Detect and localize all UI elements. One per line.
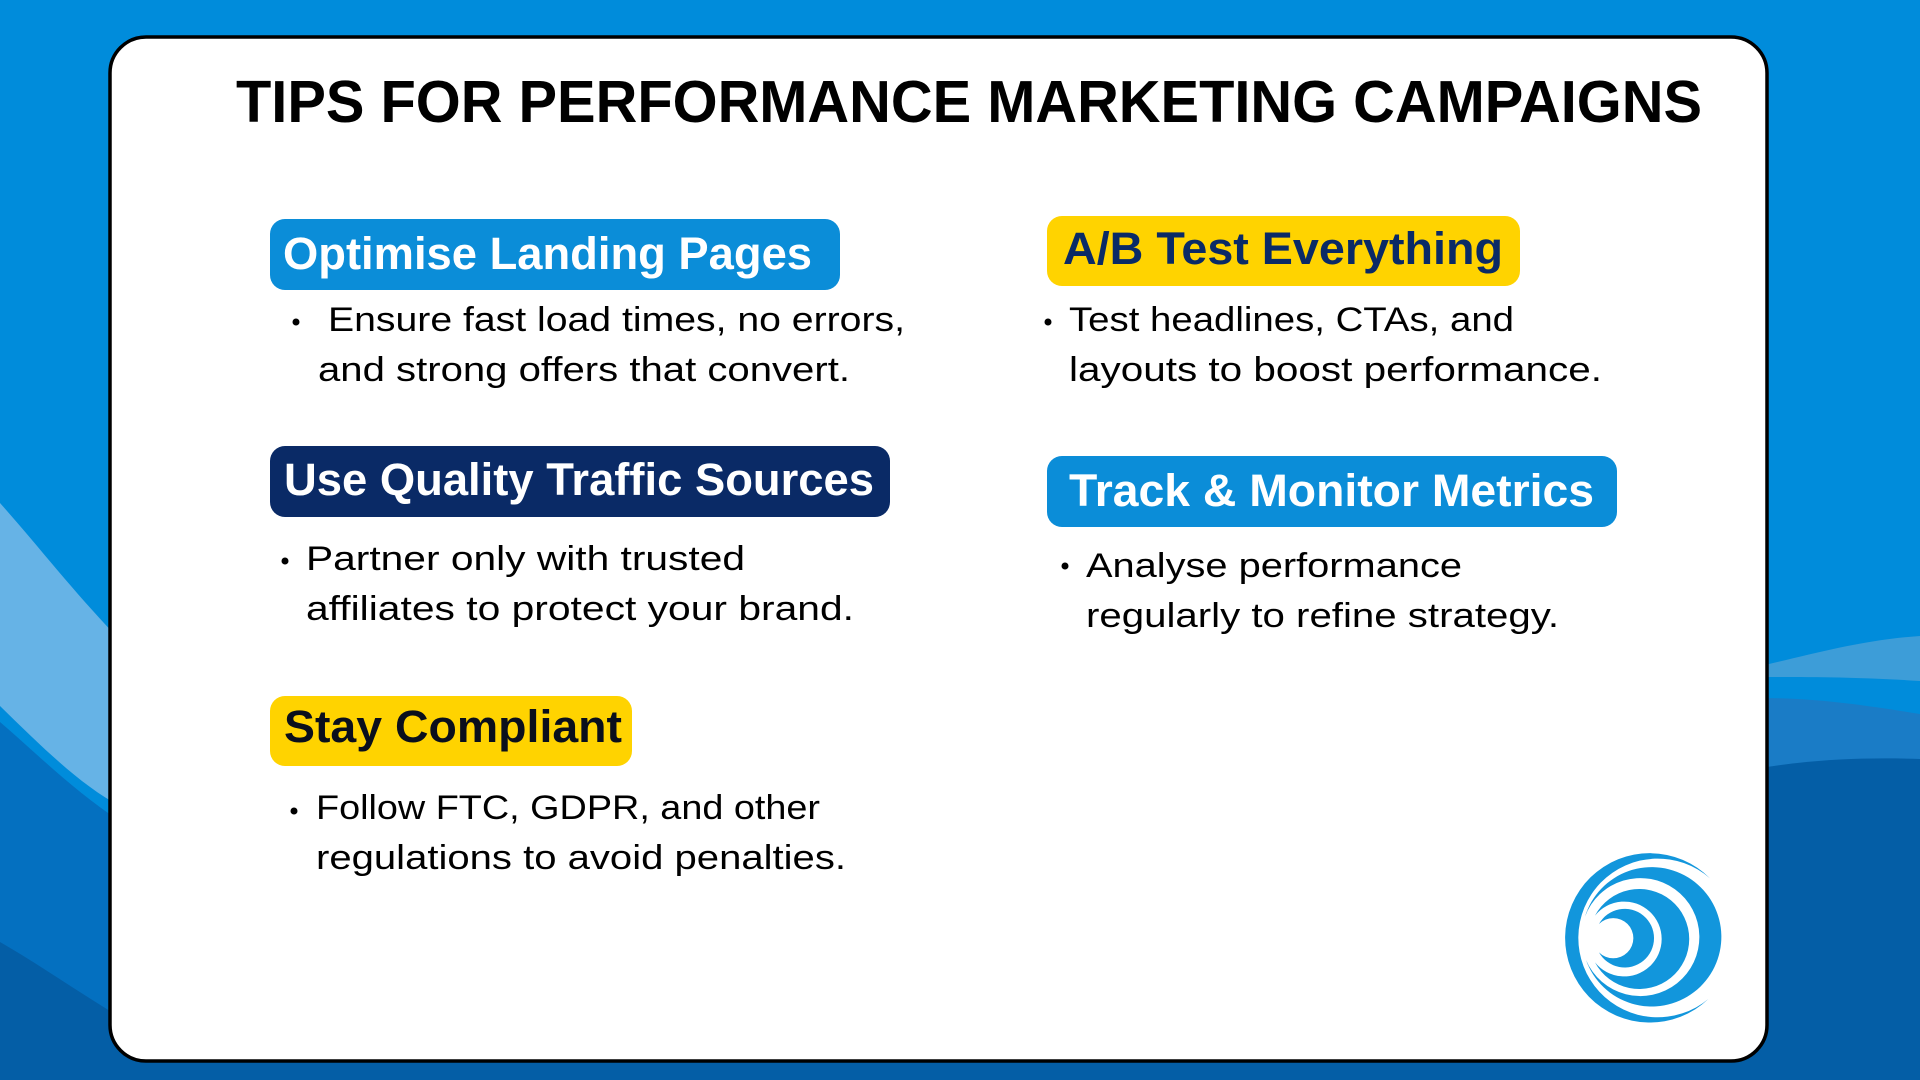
heading: use quality traffic sources — [270, 446, 890, 517]
heading: a/b test everything — [1047, 216, 1520, 286]
bullet text: optimise landing pages: Ensure fast load times, no errors, — [328, 301, 905, 339]
heading: track and monitor metrics: Track & Monitor Metrics — [1069, 465, 1594, 516]
icon: swirl logo — [1565, 853, 1721, 1023]
bullet text: use quality traffic sources: Partner only with trusted — [306, 540, 745, 578]
heading: optimise landing pages: Optimise Landing Pages — [283, 228, 812, 279]
heading: use quality traffic sources: Use Quality Traffic Sources — [284, 454, 874, 505]
bullet text: track and monitor metrics: regularly to refine strategy. — [1086, 597, 1559, 635]
panel: track and monitor metrics — [1047, 456, 1617, 635]
bullet text: a/b test everything — [1044, 301, 1602, 389]
bullet text: stay compliant: regulations to avoid penalties. — [316, 839, 846, 877]
bullet text: optimise landing pages — [292, 301, 905, 389]
bullet text: stay compliant — [290, 789, 846, 877]
bullet text: track and monitor metrics — [1062, 547, 1559, 635]
heading: stay compliant: Stay Compliant — [284, 701, 622, 752]
heading: optimise landing pages — [270, 219, 840, 290]
bullet text: stay compliant: Follow FTC, GDPR, and other — [316, 789, 820, 827]
bullet text: use quality traffic sources: affiliates to protect your brand. — [306, 590, 854, 628]
bullet text: a/b test everything: layouts to boost performance. — [1069, 351, 1602, 389]
heading: track and monitor metrics — [1047, 456, 1617, 527]
heading: stay compliant — [270, 696, 632, 766]
panel: stay compliant — [270, 696, 846, 877]
bullet text: track and monitor metrics: Analyse performance — [1086, 547, 1462, 585]
title: TIPS FOR PERFORMANCE MARKETING CAMPAIGNS — [236, 69, 1702, 135]
bullet text: a/b test everything: Test headlines, CTAs, and — [1069, 301, 1514, 339]
bullet text: optimise landing pages: and strong offers that convert. — [318, 351, 850, 389]
panel: a/b test everything — [1044, 216, 1602, 389]
panel: optimise landing pages — [270, 219, 905, 389]
panel: use quality traffic sources — [270, 446, 890, 628]
bullet text: use quality traffic sources — [282, 540, 854, 628]
heading: a/b test everything: A/B Test Everything — [1063, 223, 1503, 274]
